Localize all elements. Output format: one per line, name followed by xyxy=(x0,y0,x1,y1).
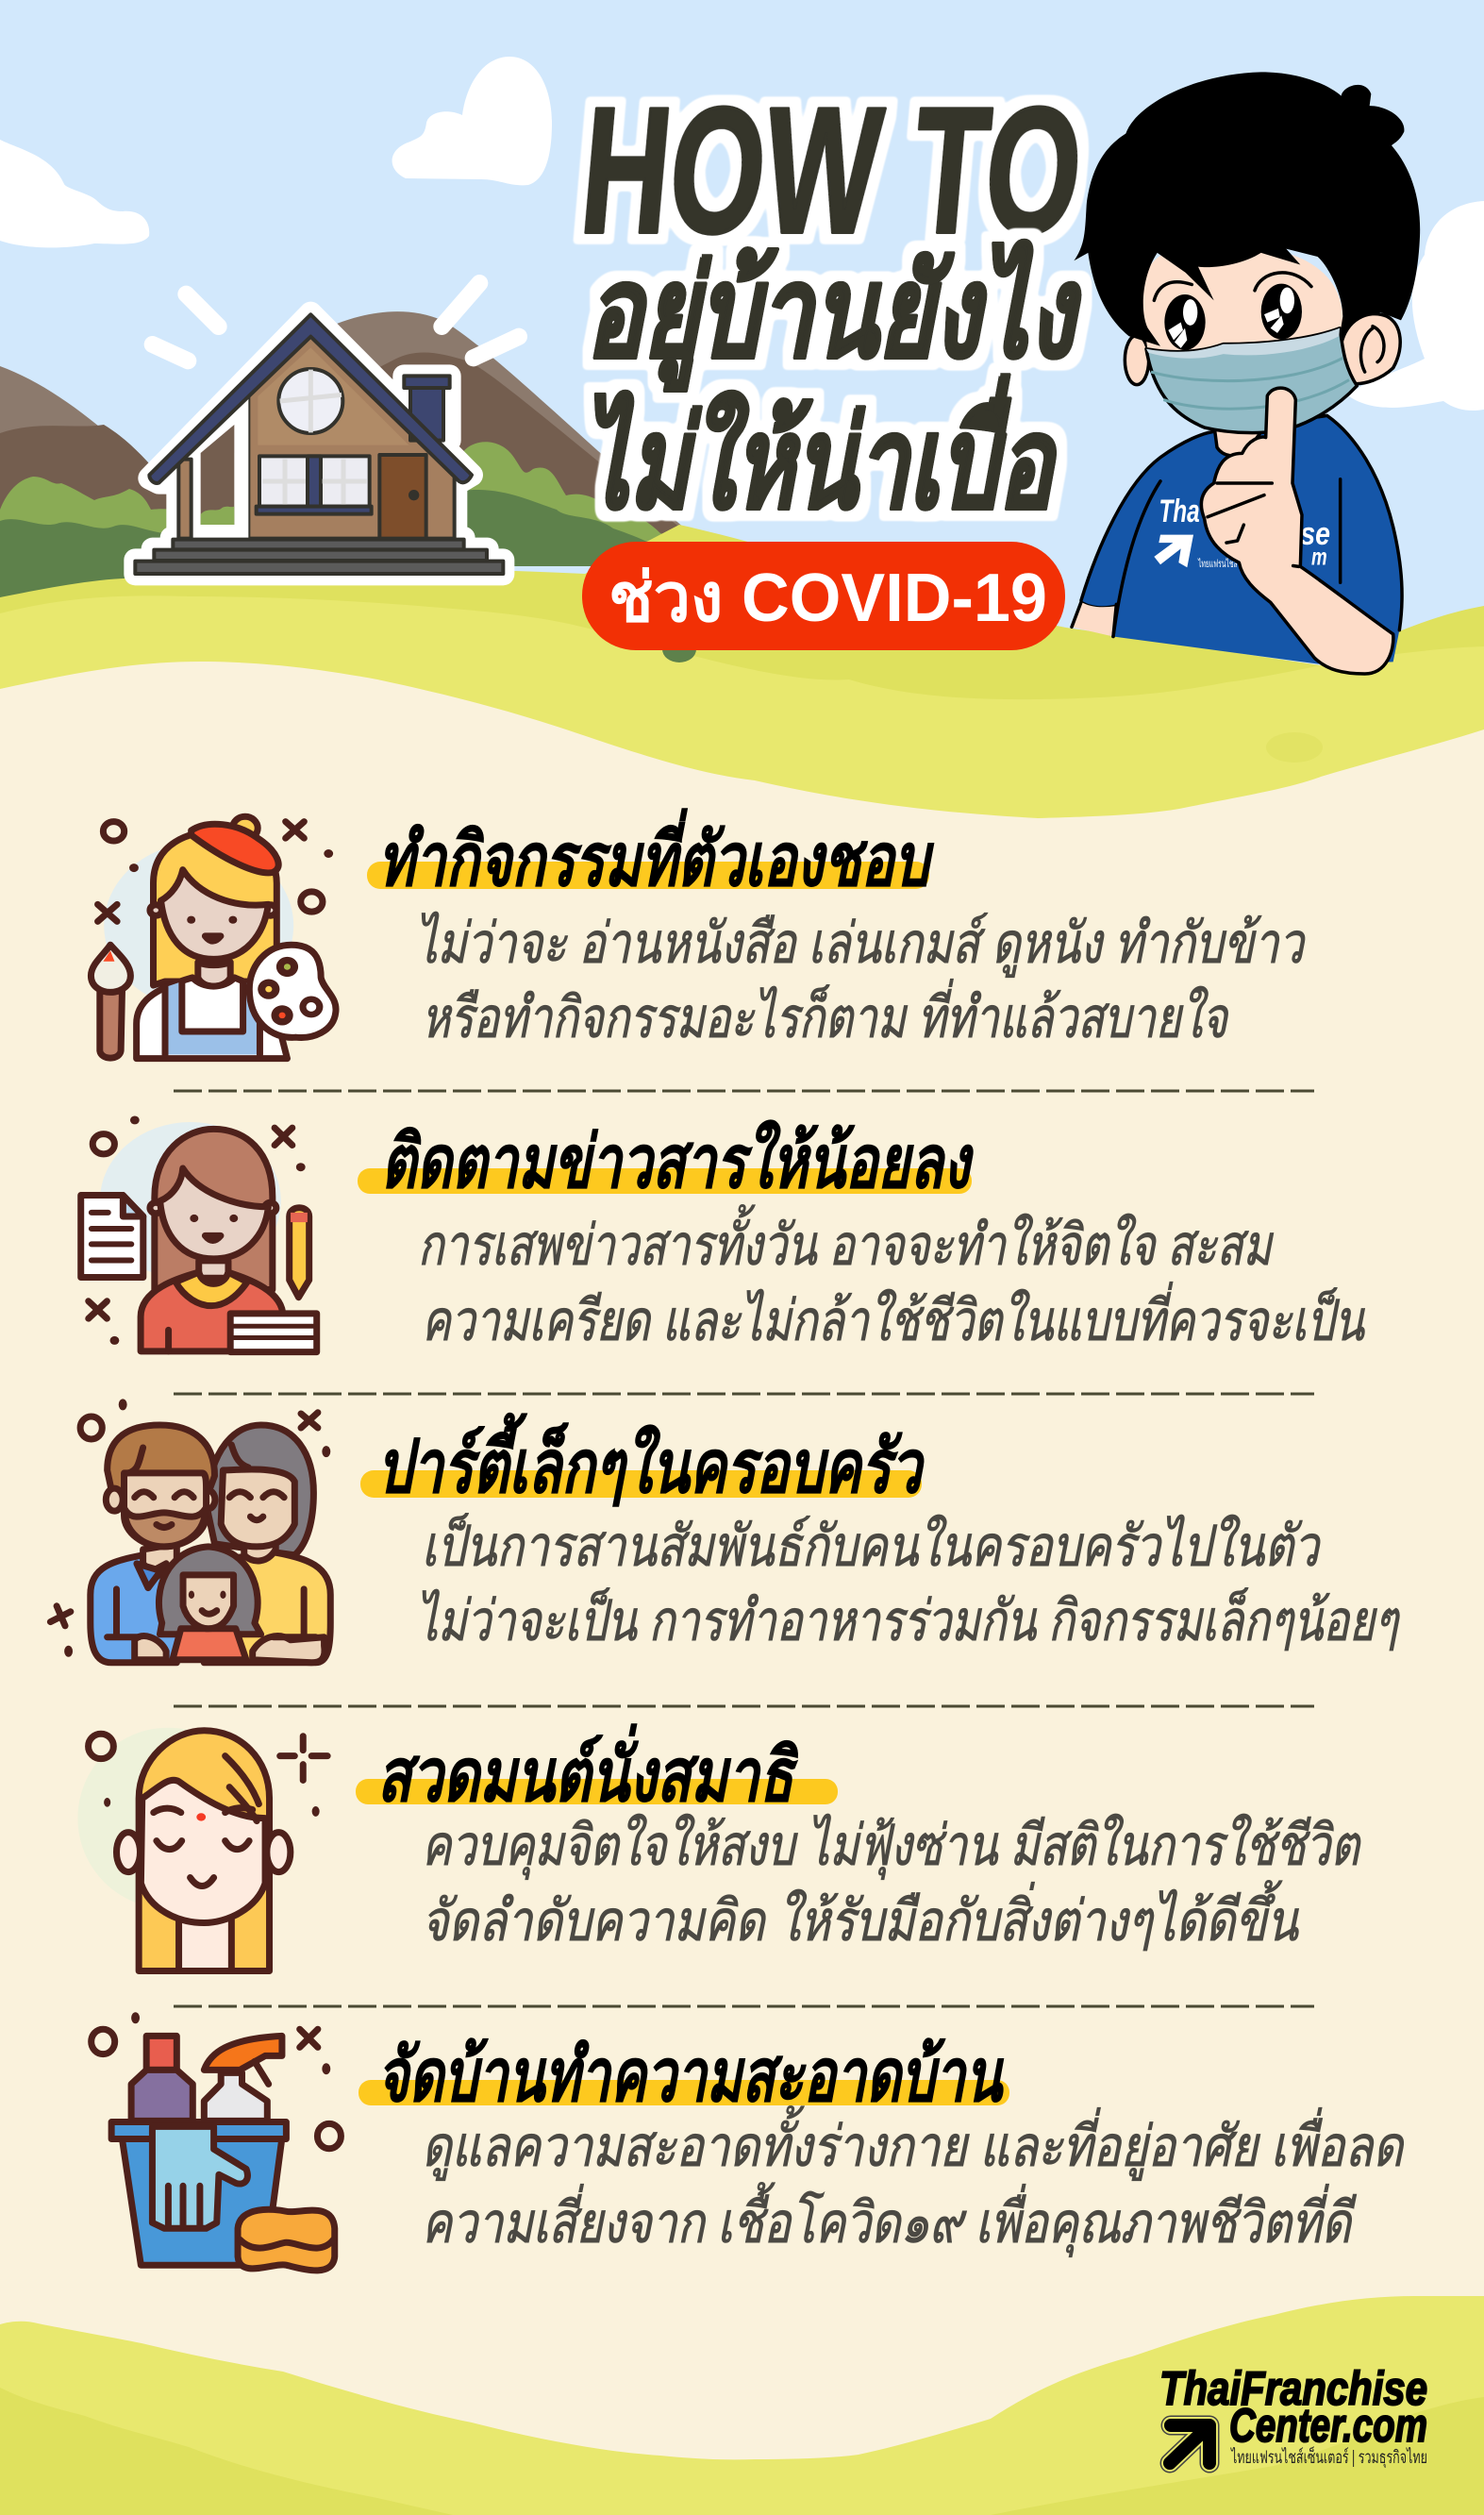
row 4 body xyxy=(422,1814,1361,1953)
boy arm left xyxy=(1072,600,1116,636)
row 1 heading: ทำกิจกรรมที่ตัวเองชอบ xyxy=(378,808,935,901)
divider 2 xyxy=(174,1393,1314,1395)
row 2 icon: news reader xyxy=(81,1115,317,1352)
bottom wave light xyxy=(0,2296,1484,2515)
row 3 icon: family xyxy=(50,1399,330,1663)
cream content panel xyxy=(0,662,1484,2515)
house white outline xyxy=(135,313,503,574)
roof xyxy=(149,314,472,483)
door xyxy=(379,455,426,539)
bottom wave dark right xyxy=(991,2397,1484,2515)
house illustration xyxy=(135,283,519,574)
row 5 heading: จัดบ้านทำความสะอาดบ้าน xyxy=(377,2034,1004,2117)
shirt logo: Tha xyxy=(1159,493,1200,529)
windows xyxy=(257,456,372,514)
row 2 body xyxy=(418,1204,1366,1352)
row 1 body: หรือทำกิจกรรมอะไรก็ตาม ที่ทำแล้วสบายใจ xyxy=(422,979,1229,1049)
row 4 body: จัดลำดับความคิด ให้รับมือกับสิ่งต่างๆได้ดีขึ้น xyxy=(422,1880,1300,1953)
title: line 3: ไม่ให้น่าเบื่อ xyxy=(583,375,1058,534)
chimney xyxy=(404,376,450,441)
logo wordmark line 2: Center.com xyxy=(1229,2399,1427,2452)
title: HOW TO: HOW TO xyxy=(574,71,1090,271)
row 2 heading: ติดตามข่าวสารให้น้อยลง xyxy=(381,1119,974,1203)
boy brows xyxy=(1154,273,1311,300)
sky background xyxy=(0,0,1484,755)
row 1 body xyxy=(415,912,1307,1049)
mountains xyxy=(0,311,717,604)
shirt logo: se xyxy=(1300,515,1330,552)
boy eye left xyxy=(1164,294,1206,350)
boy character with mask xyxy=(1072,72,1420,674)
row 1 heading xyxy=(367,808,935,901)
shirt logo: ไทยแฟรนไชส์ xyxy=(1197,558,1238,571)
logo: ThaiFranchiseCenter.com xyxy=(1159,2362,1427,2469)
trees xyxy=(0,442,693,623)
row 4 heading: สวดมนต์นั่งสมาธิ xyxy=(377,1723,798,1817)
face mask xyxy=(1146,328,1357,433)
logo wordmark line 1: ThaiFranchise xyxy=(1159,2362,1427,2415)
logo arrow xyxy=(1170,2425,1209,2463)
boy ear right xyxy=(1341,314,1400,384)
row 3 heading xyxy=(360,1413,925,1508)
divider 1 xyxy=(174,1089,1314,1093)
boy neck xyxy=(1214,424,1267,456)
divider 4 xyxy=(174,2004,1314,2008)
side porch xyxy=(178,394,248,539)
row 3 body xyxy=(416,1513,1400,1652)
row 5 body xyxy=(422,2105,1405,2257)
house wall xyxy=(248,335,455,539)
background hill: light yellow xyxy=(0,595,1484,849)
clouds xyxy=(0,57,1484,411)
boy shirt xyxy=(1081,415,1402,663)
tree remnant under badge xyxy=(662,636,696,662)
boy ear left xyxy=(1125,335,1149,385)
boy hand xyxy=(1201,388,1393,674)
divider 3 xyxy=(174,1704,1314,1708)
round window xyxy=(278,369,342,433)
hill blotch xyxy=(1266,732,1323,763)
boy eye right xyxy=(1261,284,1302,340)
covid badge: ช่วง COVID-19 xyxy=(609,561,1047,636)
row 1 icon: artist xyxy=(91,816,336,1059)
shirt seams xyxy=(1113,479,1341,636)
shirt logo: m xyxy=(1311,543,1327,570)
bottom wave dark left xyxy=(0,2388,453,2515)
steps xyxy=(135,540,503,574)
row 4 icon: meditation xyxy=(77,1728,327,1970)
row 5 icon: cleaning bucket xyxy=(92,2012,341,2271)
boy hair xyxy=(1074,72,1420,346)
title: line 2: อยู่บ้านยังไง xyxy=(586,240,1081,392)
shirt logo xyxy=(1154,493,1330,571)
boy face xyxy=(1142,244,1342,368)
row 3 heading: ปาร์ตี้เล็กๆในครอบครัว xyxy=(377,1413,925,1508)
covid badge xyxy=(582,542,1065,650)
background hill: dark yellow xyxy=(0,525,1484,774)
house sparkle rays xyxy=(153,283,519,360)
